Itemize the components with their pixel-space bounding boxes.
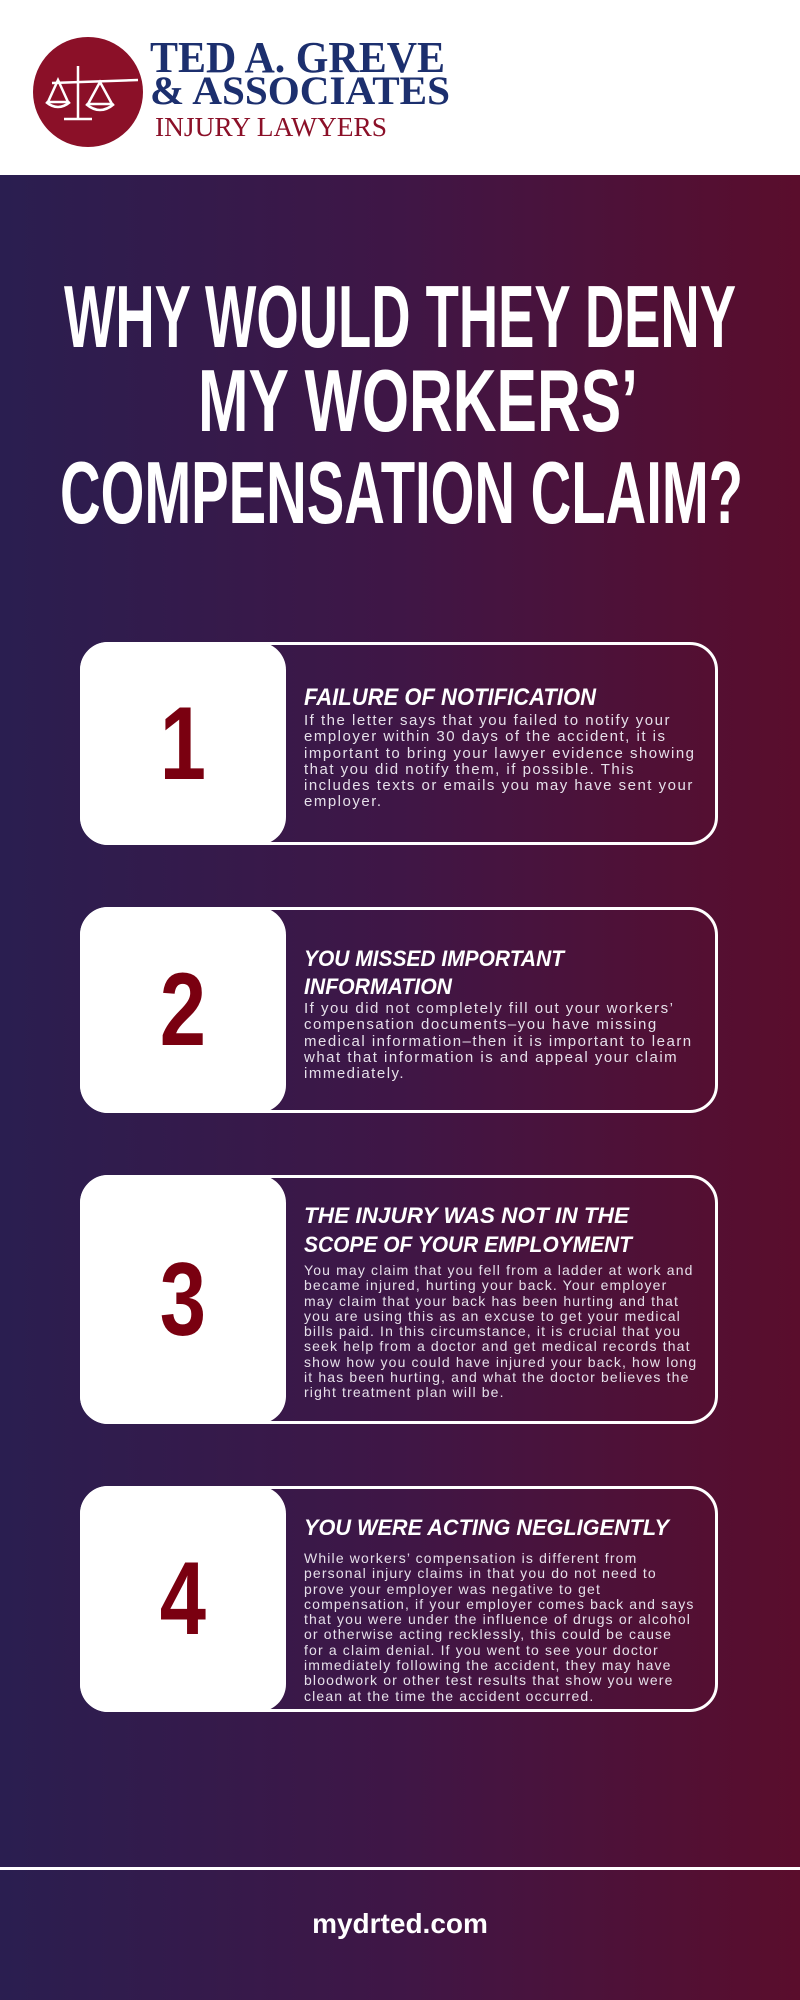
heading 3 <box>304 1203 634 1257</box>
title <box>60 267 743 540</box>
text 3: seek help from a doctor and get medical records that <box>304 1338 691 1354</box>
text 3: you are using this as an excuse to get your medical <box>304 1308 681 1324</box>
logo text <box>150 33 450 142</box>
text 1: includes texts or emails you may have sent your <box>304 777 694 794</box>
text 4 <box>304 1550 695 1704</box>
logo text: & ASSOCIATES <box>150 68 450 113</box>
card 1 <box>80 642 718 845</box>
number 3 <box>80 1175 286 1424</box>
text 3: may claim that your back has been hurting and that <box>304 1293 679 1309</box>
text 3: it has been hurting, and what the doctor believes the <box>304 1369 690 1385</box>
number 3: 3 <box>160 1242 206 1358</box>
text 2: immediately. <box>304 1065 405 1082</box>
text 1: employer within 30 days of the accident, it is <box>304 728 666 745</box>
heading 1: FAILURE OF NOTIFICATION <box>304 684 597 711</box>
text 1 <box>304 712 696 810</box>
heading 4: YOU WERE ACTING NEGLIGENTLY <box>304 1515 671 1540</box>
heading 2 <box>304 946 566 999</box>
text 2: If you did not completely fill out your workers’ <box>304 1000 674 1017</box>
text 2: medical information–then it is important to learn <box>304 1033 693 1050</box>
text 4: personal injury claims in that you do not need to <box>304 1565 657 1581</box>
text 4: or otherwise acting recklessly, this could be cause <box>304 1626 672 1642</box>
number 4 <box>80 1486 286 1712</box>
number 2 <box>80 907 286 1113</box>
text 2: compensation documents–you have missing <box>304 1016 658 1033</box>
text 3: right treatment plan will be. <box>304 1384 505 1400</box>
text 2 <box>304 1000 693 1082</box>
card 4 <box>80 1486 718 1712</box>
text 3: show how you could have injured your back, how long <box>304 1354 697 1370</box>
icon: scales of justice <box>33 37 143 147</box>
number 4: 4 <box>160 1541 206 1657</box>
text 4: for a claim denial. If you went to see your doctor <box>304 1642 659 1658</box>
number 1 <box>80 642 286 845</box>
text 4: bloodwork or other test results that show you were <box>304 1672 674 1688</box>
logo text: TED A. GREVE <box>150 33 445 82</box>
text 4: compensation, if your employer comes back and says <box>304 1596 695 1612</box>
text 4: prove your employer was negative to get <box>304 1581 601 1597</box>
text 1: that you did notify them, if possible. This <box>304 761 635 778</box>
logo text: INJURY LAWYERS <box>155 112 387 142</box>
text 1: employer. <box>304 793 383 810</box>
number 1: 1 <box>160 686 206 802</box>
text 3: became injured, hurting your back. Your employer <box>304 1277 667 1293</box>
footer url: mydrted.com <box>312 1908 488 1939</box>
header logo <box>33 33 450 147</box>
card 2 <box>80 907 718 1113</box>
text 3 <box>304 1262 697 1400</box>
heading 3: THE INJURY WAS NOT IN THE <box>304 1203 630 1228</box>
text 2: what that information is and appeal your claim <box>304 1049 678 1066</box>
text 4: immediately following the accident, they may have <box>304 1657 672 1673</box>
text 4: clean at the time the accident occurred. <box>304 1688 594 1704</box>
text 1: If the letter says that you failed to notify your <box>304 712 671 729</box>
text 4: that you were under the influence of drugs or alcohol <box>304 1611 691 1627</box>
text 4: While workers’ compensation is different from <box>304 1550 637 1566</box>
text 1: important to bring your lawyer evidence showing <box>304 745 696 762</box>
heading 3: SCOPE OF YOUR EMPLOYMENT <box>304 1232 633 1257</box>
text 3: bills paid. In this circumstance, it is crucial that you <box>304 1323 681 1339</box>
heading 2: INFORMATION <box>304 974 453 999</box>
number 2: 2 <box>160 952 206 1068</box>
card 3 <box>80 1175 718 1424</box>
text 3: You may claim that you fell from a ladder at work and <box>304 1262 694 1278</box>
heading 2: YOU MISSED IMPORTANT <box>304 946 565 971</box>
